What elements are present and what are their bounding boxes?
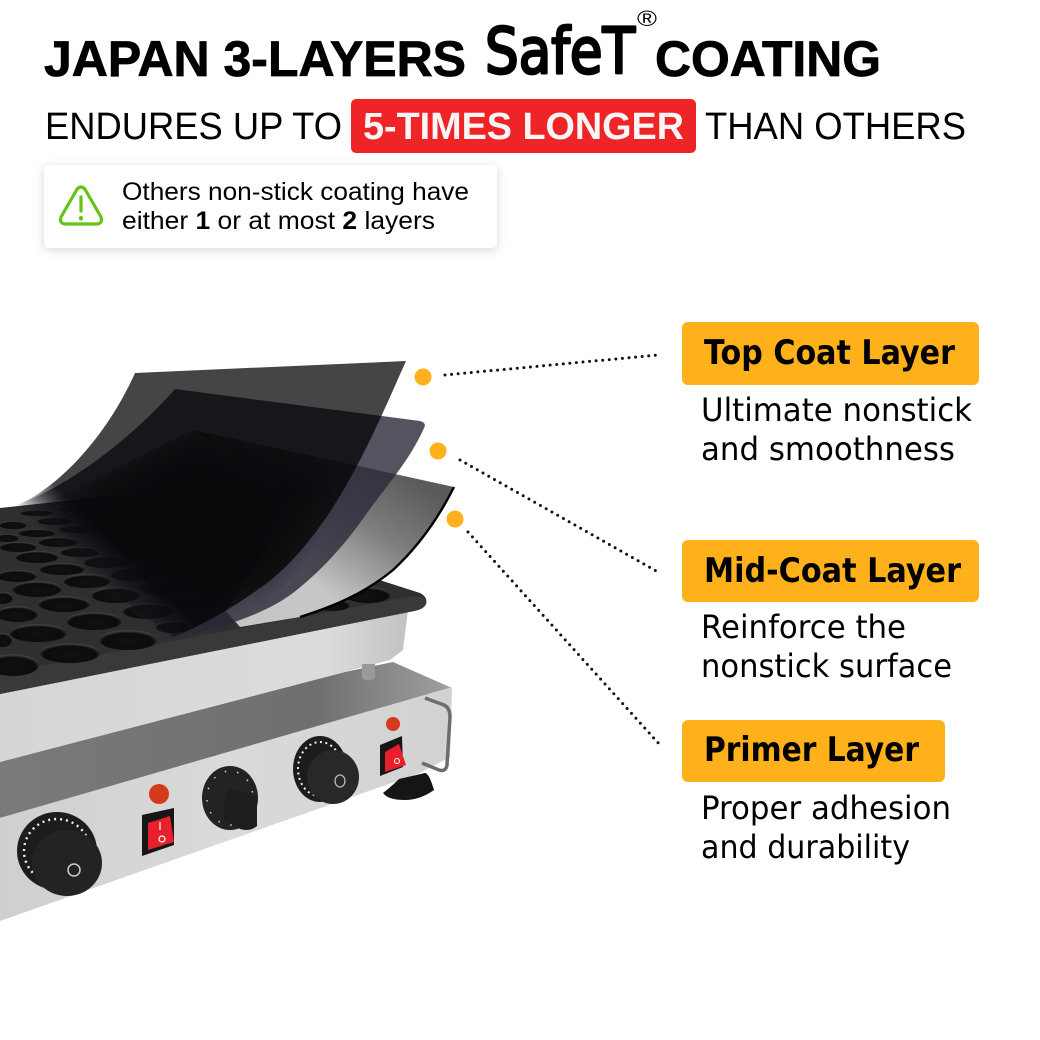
layer sheet: top coat (17, 361, 406, 637)
foot (383, 773, 434, 800)
layer sheet: primer (193, 430, 454, 627)
description: Ultimate nonstick (701, 391, 972, 429)
control: right indicator light (386, 717, 400, 731)
griddle rim (0, 596, 426, 694)
control: left rocker switch (142, 808, 174, 856)
griddle dimples (0, 506, 391, 676)
icon: warning triangle (61, 187, 101, 224)
control: left knob (17, 812, 102, 896)
heading: Primer Layer (704, 730, 919, 770)
subtitle (45, 99, 966, 153)
description: Reinforce the (701, 608, 906, 646)
title: JAPAN 3-LAYERS (44, 31, 466, 87)
subtitle: ENDURES UP TO (45, 106, 342, 148)
callout text: Others non-stick coating have (122, 178, 469, 206)
leader: mid coat (430, 442, 658, 572)
description: Proper adhesion (701, 789, 951, 827)
control: middle dial (202, 766, 258, 830)
registered mark: ® (637, 6, 657, 31)
silver griddle base (0, 610, 408, 762)
description (701, 789, 951, 866)
machine shelf (0, 662, 452, 818)
description: and durability (701, 828, 910, 866)
title (44, 6, 881, 88)
panel: primer layer (682, 720, 951, 866)
heading: Top Coat Layer (704, 333, 955, 373)
description (701, 608, 952, 685)
panel: top coat layer (682, 322, 979, 468)
title end: COATING (655, 31, 881, 87)
description: nonstick surface (701, 647, 952, 685)
control: right knob (293, 736, 359, 804)
SafeT brand wordmark: SafeT (485, 15, 635, 88)
leader: primer (446, 510, 660, 745)
control: left indicator light (149, 784, 169, 804)
description (701, 391, 972, 468)
sheet shadow on griddle (86, 440, 300, 601)
subtitle end: THAN OTHERS (705, 106, 966, 148)
support post (362, 664, 375, 680)
machine front panel (0, 687, 452, 921)
heading: Mid-Coat Layer (704, 551, 961, 591)
callout text (122, 178, 469, 235)
control: right rocker switch (380, 736, 406, 776)
handle (422, 698, 450, 770)
leader: top coat (414, 355, 658, 386)
description: and smoothness (701, 430, 955, 468)
panel: mid-coat layer (682, 540, 979, 685)
callout: others coating (44, 165, 497, 248)
callout text: either 1 or at most 2 layers (122, 207, 435, 235)
red highlight badge: 5-TIMES LONGER (363, 106, 684, 148)
griddle plate (0, 494, 426, 694)
product: waffle machine (0, 361, 454, 921)
layer sheet: mid coat (17, 389, 425, 640)
primer sheet black edge (300, 487, 454, 617)
